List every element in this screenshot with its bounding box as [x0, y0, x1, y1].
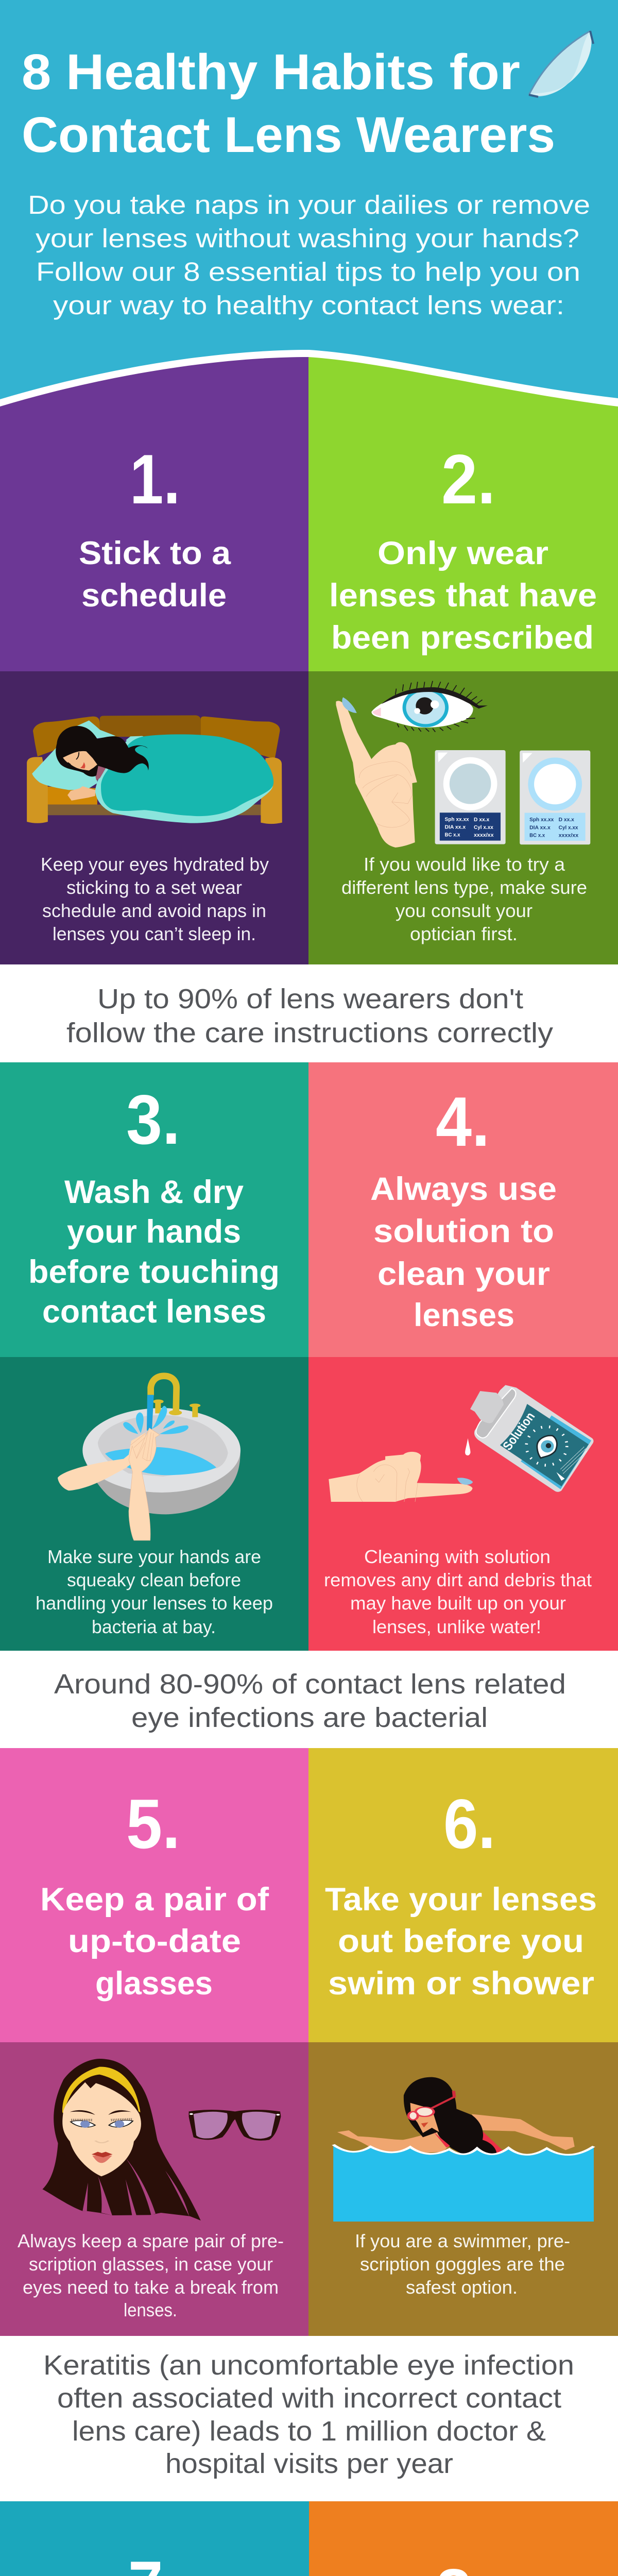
heading 4: clean your — [377, 1256, 550, 1292]
intro text — [28, 190, 590, 320]
panel: habit 2 detail — [308, 671, 618, 964]
body text 1: sticking to a set wear — [66, 877, 242, 898]
heading 3: contact lenses — [42, 1294, 266, 1330]
number 2: 2. — [441, 440, 495, 518]
heading 6 — [325, 1882, 597, 2002]
stat: care instructions: follow the care instructions correctly — [66, 1018, 553, 1048]
heading 3 — [28, 1174, 280, 1330]
panel: habit 1 — [0, 357, 308, 671]
stat: keratitis — [43, 2350, 574, 2479]
panel: habit 7 — [0, 2501, 309, 2576]
lens blister: light label: BC x.x — [529, 833, 545, 838]
intro text: Do you take naps in your dailies or remove — [28, 190, 590, 219]
body text 3: Make sure your hands are — [47, 1546, 261, 1567]
heading 6: Take your lenses — [325, 1882, 597, 1918]
body text 4 — [324, 1546, 592, 1637]
heading 1 — [79, 535, 231, 614]
body text 3: squeaky clean before — [67, 1569, 241, 1590]
heading 4: Always use — [370, 1171, 557, 1207]
heading 2: been prescribed — [331, 620, 594, 656]
stat: bacterial infections — [54, 1669, 566, 1733]
body text 1: schedule and avoid naps in — [42, 900, 266, 921]
panel: habit 3 detail — [0, 1357, 308, 1651]
body text 2: different lens type, make sure — [341, 877, 587, 898]
illustration: washing hands at sink — [58, 1376, 241, 1540]
lens blister: dark label — [435, 750, 506, 844]
heading 4: solution to — [373, 1213, 554, 1249]
lens blister: dark label: BC x.x — [445, 833, 460, 838]
stat: keratitis: often associated with incorrect contact — [57, 2383, 561, 2414]
heading 2: Only wear — [377, 535, 548, 571]
panel: habit 1 detail — [0, 671, 308, 964]
title: Contact Lens Wearers — [22, 107, 555, 163]
body text 3: handling your lenses to keep — [36, 1592, 273, 1614]
hand with lens — [336, 697, 417, 848]
lens blister: dark label: Sph xx.xx — [445, 817, 469, 822]
heading 4: lenses — [414, 1297, 514, 1333]
heading 3: before touching — [28, 1254, 280, 1290]
body text 1 — [41, 854, 269, 944]
lens blister: dark label: DIA xx.x — [445, 825, 466, 831]
body text 2: optician first. — [410, 923, 518, 944]
body text 5: scription glasses, in case your — [29, 2253, 273, 2275]
body text 6: If you are a swimmer, pre- — [355, 2230, 570, 2251]
heading 5 — [40, 1882, 269, 2002]
illustration: finger, lens, eye and lens blisters — [336, 681, 590, 848]
stat: care instructions — [66, 984, 553, 1048]
intro text: your lenses without washing your hands? — [36, 224, 579, 253]
stat: keratitis: Keratitis (an uncomfortable eye infection — [43, 2350, 574, 2381]
title — [22, 44, 555, 163]
heading 4 — [370, 1171, 557, 1333]
body text 5 — [18, 2230, 284, 2320]
body text 1: lenses you can’t sleep in. — [53, 923, 256, 944]
stat: care instructions: Up to 90% of lens wearers don't — [97, 984, 523, 1014]
lens blister: dark label: D xx.x — [474, 817, 490, 823]
body text 4: Cleaning with solution — [364, 1546, 551, 1567]
heading 2: lenses that have — [329, 578, 597, 614]
body text 2: you consult your — [396, 900, 533, 921]
body text 6 — [355, 2230, 570, 2298]
solution drop — [465, 1438, 470, 1455]
lens blister: light label: Cyl x.xx — [559, 825, 578, 831]
eye — [371, 681, 488, 732]
intro text: your way to healthy contact lens wear: — [53, 291, 564, 320]
body text 4: may have built up on your — [350, 1592, 566, 1614]
heading 5: glasses — [95, 1965, 213, 2002]
header panel — [0, 0, 618, 412]
lens blister: light label: xxxx/xx — [559, 833, 579, 838]
panel: habit 3 — [0, 1062, 308, 1357]
title: 8 Healthy Habits for — [22, 44, 520, 100]
body text 5: Always keep a spare pair of pre- — [18, 2230, 284, 2251]
bottle: Solution — [501, 1410, 538, 1453]
panel: habit 5 detail — [0, 2042, 308, 2336]
body text 4: lenses, unlike water! — [372, 1616, 541, 1637]
lens blister: dark label: Cyl x.xx — [474, 825, 493, 831]
stat: bacterial infections: Around 80-90% of contact lens related — [54, 1669, 566, 1700]
number 4: 4. — [436, 1082, 490, 1161]
heading 6: swim or shower — [328, 1965, 594, 2002]
body text 3 — [36, 1546, 273, 1637]
number 3: 3. — [126, 1080, 180, 1159]
heading 6: out before you — [338, 1923, 584, 1959]
body text 5: lenses. — [124, 2299, 177, 2320]
illustration: woman sleeping on sofa — [27, 715, 282, 824]
body text 5: eyes need to take a break from — [23, 2277, 279, 2298]
body text 6: scription goggles are the — [360, 2253, 565, 2275]
body text 2: If you would like to try a — [364, 854, 565, 875]
panel: habit 8 — [309, 2501, 618, 2576]
lens blister: light label — [520, 751, 590, 844]
hand — [329, 1452, 473, 1502]
heading 3: Wash & dry — [64, 1174, 244, 1210]
number 5: 5. — [126, 1785, 180, 1863]
heading 1: schedule — [81, 578, 227, 614]
illustration: swimmer in water — [333, 2077, 594, 2222]
heading 5: Keep a pair of — [40, 1882, 269, 1918]
panel: habit 4 detail — [308, 1357, 618, 1651]
stat: bacterial infections: eye infections are bacterial — [131, 1702, 488, 1733]
white wave edge — [0, 350, 618, 422]
glasses — [189, 2110, 281, 2141]
body text 6: safest option. — [406, 2277, 518, 2298]
heading 1: Stick to a — [79, 535, 231, 571]
heading 3: your hands — [67, 1214, 241, 1250]
panel: habit 4 — [308, 1062, 618, 1357]
bottle — [470, 1385, 593, 1492]
icon: contact lens — [529, 31, 593, 97]
panel: habit 5 — [0, 1748, 308, 2042]
lens blister: dark label: xxxx/xx — [474, 833, 494, 838]
body text 1: Keep your eyes hydrated by — [41, 854, 269, 875]
heading 2 — [329, 535, 597, 656]
body text 3: bacteria at bay. — [92, 1616, 216, 1637]
heading 5: up-to-date — [68, 1923, 241, 1959]
number 6: 6. — [443, 1785, 495, 1863]
panel: habit 6 — [308, 1748, 618, 2042]
body text 2 — [341, 854, 587, 944]
stat: keratitis: hospital visits per year — [165, 2448, 453, 2479]
stat: keratitis: lens care) leads to 1 million doctor & — [72, 2416, 546, 2447]
panel: habit 2 — [308, 357, 618, 671]
number 1: 1. — [130, 440, 180, 518]
lens blister: light label: D xx.x — [559, 817, 574, 823]
intro text: Follow our 8 essential tips to help you on — [36, 257, 580, 286]
lens blister: light label: DIA xx.x — [529, 825, 551, 831]
illustration: woman with headband and glasses — [42, 2059, 281, 2221]
illustration: solution bottle dripping onto lens on finger — [329, 1385, 593, 1502]
woman — [42, 2059, 201, 2221]
panel: habit 6 detail — [308, 2042, 618, 2336]
lens blister: light label: Sph xx.xx — [529, 817, 554, 823]
body text 4: removes any dirt and debris that — [324, 1569, 592, 1590]
